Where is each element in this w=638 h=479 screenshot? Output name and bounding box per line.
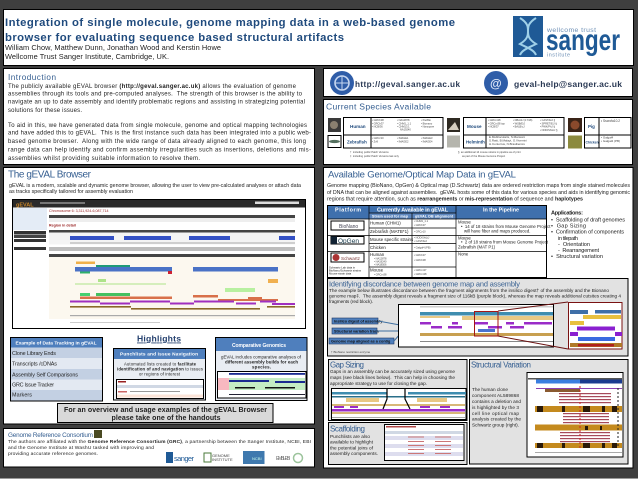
comparative genomics screenshot — [218, 372, 306, 398]
table: platforms: • NA19240 — [374, 260, 387, 264]
panel: comparative genomics: gEVAL includes comparative analyses of — [221, 354, 302, 360]
table: human and zebrafish: • GRCh37 — [372, 122, 384, 126]
logo: Wellcome Trust Sanger: wellcome trust — [546, 27, 596, 34]
title: browser for evaluating sequence based structural artifacts — [5, 32, 344, 44]
heading: structural variation: Structural Variation — [471, 360, 531, 370]
discordance description: The example below illustrates discordance between the fragment alignments from the insilico digest† of the assembly and the Bionano — [329, 288, 609, 293]
table: platforms: • GRCh37 — [414, 253, 426, 257]
table: platforms: BioNano/Schwartz strains — [329, 268, 362, 272]
callout: handouts — [58, 404, 273, 422]
logo: OpGen: OpGen — [338, 238, 359, 245]
heading: the gEVAL browser: The gEVAL Browser — [8, 170, 92, 180]
introduction text: To aid in this, we have generated data from single molecule, genome and optical mapping technologies — [8, 123, 307, 129]
panel: the gEVAL browser — [4, 168, 314, 424]
logo: Schwartz lab: Schwartz — [341, 256, 361, 261]
heading: introduction: Introduction — [8, 73, 56, 82]
scaffolding description: Punchlists are also — [330, 434, 370, 439]
table: platforms: Zebrafish (MATB*1) — [370, 229, 409, 234]
gap sizing description: Gaps in an assembly can be accurately sized using genome — [330, 369, 455, 374]
table: mouse and helminth: H.Contortus, N.Brasiliensis — [489, 142, 525, 146]
structural variation description: contains a deletion and — [472, 399, 521, 404]
table: pig and chicken: • Galgal4 — [601, 136, 614, 140]
introduction text: navigate an up to date assembly and identify problematic regions and assisting in strategizing potential — [8, 100, 305, 106]
table: platforms: • GRCh37 — [414, 223, 426, 227]
gap sizing description: appropriate strategy to use for closing the gap. — [330, 381, 427, 386]
icon: mouse photo — [447, 118, 460, 132]
panel: punchlists: identification of and navigation to issues — [117, 366, 203, 372]
discordance figure — [398, 304, 554, 347]
table: platforms: • CAST/EiJ — [414, 239, 428, 243]
panel: punchlists: Punchlists and Issue Navigation — [120, 352, 198, 358]
table: platforms: Strain used for map — [372, 214, 409, 218]
table: platforms: Currently Available in gEVAL — [377, 208, 449, 214]
browser screenshot — [12, 200, 306, 328]
logo: EMBL-EBI: EMBL-EBI — [276, 456, 291, 462]
icon: pig photo — [568, 118, 582, 132]
introduction text: solutions for these issues. — [8, 108, 82, 114]
logo: Sanger: sanger — [174, 454, 194, 463]
logo: Wellcome Trust Sanger — [513, 16, 620, 58]
table: platforms: • 2 of 18 strains from Mouse Genome Project — [461, 240, 549, 244]
icon: at sign: @ — [490, 76, 502, 90]
table: mouse and helminth: • CAST/EiJ § — [540, 118, 556, 122]
introduction text — [8, 84, 311, 162]
logo: Schwartz lab — [331, 253, 364, 262]
zoom guide lines — [498, 302, 568, 349]
table: human and zebrafish: • PacBio — [421, 118, 431, 122]
table: platforms: Mouse — [458, 236, 472, 240]
panel: available genome/optical map data — [324, 168, 633, 468]
table: pig and chicken — [584, 118, 631, 148]
table: human and zebrafish: • GRCh38 — [372, 118, 384, 122]
email link: geval-help@sanger.ac.uk — [514, 79, 622, 89]
authors — [5, 43, 221, 61]
applications list: - Orientation — [558, 242, 590, 248]
table: mouse and helminth: Mouse — [467, 124, 482, 129]
browser description — [9, 183, 301, 195]
table: platforms: • GRCz10 — [414, 230, 426, 234]
table: human and zebrafish — [344, 118, 443, 148]
website link: http://geval.sanger.ac.uk — [355, 80, 460, 89]
table: platforms: Schwartz Lab data in — [329, 266, 356, 270]
table: platforms: Mouse — [370, 268, 384, 272]
browser screenshot: Region in detail — [49, 224, 76, 228]
applications list: • Gap Sizing — [551, 224, 586, 230]
table: platforms: • 14 of 18 strains from Mouse Genome Project — [461, 224, 551, 229]
table: human and zebrafish: • Nanopore — [421, 124, 435, 128]
icon: zebrafish photo — [328, 136, 341, 148]
table: human and zebrafish: Human — [350, 124, 366, 129]
panel: punchlists: Automated lists created to facilitate — [124, 362, 197, 366]
table: pig and chicken: • Galgal4 (PB) — [601, 139, 620, 143]
table: mouse and helminth: • SPRET/EiJ § — [540, 122, 557, 126]
table: human and zebrafish: NA19240 — [400, 128, 411, 132]
punchlist screenshot — [116, 380, 204, 398]
table: mouse and helminth: • WSB/EiJ — [513, 122, 526, 126]
logo: EMBL-EBI — [276, 454, 302, 462]
panel: current species available — [324, 100, 632, 164]
browser description: gEVAL is a modern, scalable and dynamic genome browser, allowing the user to view pre-calculated analyses or attach data — [9, 183, 301, 189]
scaffolding screenshot — [384, 424, 464, 460]
panel: scaffolding — [328, 422, 467, 464]
gap sizing figure — [332, 388, 466, 420]
table: mouse and helminth: • BALB/cJ — [513, 124, 525, 128]
GRC description: providing accurate reference genomes. — [8, 451, 98, 457]
structural variation description — [472, 387, 521, 428]
table: pig and chicken: • Sscrofa10.2 — [601, 119, 620, 123]
genome mapping description: Genome mapping (BioNano, OpGen) & Optical map (D.Schwartz) data are ordered restriction maps from single stained molecules — [327, 183, 630, 189]
heading: scaffolding: Scaffolding — [330, 424, 365, 434]
callout: handouts: For an overview and usage examples of the gEVAL Browser — [64, 407, 267, 414]
title panel — [4, 10, 634, 66]
highlight box — [474, 312, 498, 336]
footnote: † BioNano restriction enzyme — [331, 350, 371, 354]
panel: genome reference consortium — [4, 428, 314, 467]
table: platforms: • GRCm37 — [414, 268, 427, 272]
zoomed inset — [568, 302, 622, 349]
introduction text: assemblies whilst providing suitable information to resolve them. — [8, 156, 200, 162]
table: human and zebrafish: • IMAGE3 — [421, 136, 433, 140]
table: human and zebrafish: • Zv9 — [372, 140, 379, 144]
panel: structural variation — [470, 360, 628, 464]
callout: handouts: please take one of the handouts — [112, 415, 221, 422]
structural variation description: component AL589868 — [472, 393, 519, 398]
structural variation description: cell line optical map — [472, 411, 519, 416]
table: example of data tracks: Example of Data Tracking in gEVAL — [16, 340, 97, 346]
species footnotes: ‡ including public Patch Versions last only — [350, 154, 400, 158]
discordance description: genome map‡. The assembly digest reveals a fragment size of 116kB (purple block), whereas the map reveals additional cutsites creating 4 — [329, 294, 621, 298]
applications list: in tilepath — [558, 236, 578, 242]
title: Integration of single molecule, genome mapping data in a web-based genome — [5, 17, 455, 29]
authors: Wellcome Trust Sanger Institute, Cambridge, UK. — [5, 52, 169, 61]
table: platforms: None — [458, 252, 469, 256]
logo: Sanger — [166, 452, 194, 463]
table: mouse and helminth: • PWK/PhJ § — [540, 124, 555, 128]
authors: William Chow, Matthew Dunn, Jonathan Wood and Kerstin Howe — [5, 43, 221, 52]
table: platforms: • Galgal4 (PB) — [414, 246, 431, 250]
callout labels: Insilico digest of assembly — [334, 320, 383, 324]
panel: links — [324, 68, 632, 96]
applications list — [551, 210, 625, 260]
heading: identifying discordance: Identifying discordance between genome map and assembly — [329, 280, 520, 288]
panel: introduction — [4, 68, 314, 164]
applications list: • Confirmation of components — [551, 230, 624, 236]
callout labels: Genome map aligned as a contig — [331, 340, 391, 344]
table: example of data tracks — [10, 338, 102, 401]
table: mouse and helminth: • NOD/ShiLtJ § — [540, 128, 558, 132]
table: mouse and helminth: • GRCm38 top — [488, 122, 505, 126]
scaffolding description: available to highlight — [330, 440, 374, 444]
introduction text: range data can help identify and confirm assembly irregularities such as insertions, deletions and mis- — [8, 148, 311, 154]
structural variation description: is highlighted by the 3 — [472, 405, 519, 410]
table: mouse and helminth: • NCBI37 — [488, 124, 499, 128]
panel: punchlists: or regions of interest — [139, 372, 181, 376]
table: example of data tracks: Clone Library Ends — [12, 351, 56, 357]
logo: OpGen — [331, 236, 364, 245]
table: human and zebrafish: • IMAGE2 — [397, 140, 409, 144]
GRC description — [8, 439, 311, 457]
table: platforms: Mouse strain data — [329, 272, 352, 276]
GRC description: The authors are affiliated with the Genome Reference Consortium (GRC), a partnership between the Sanger Institute, NCBI, EBI — [8, 439, 311, 445]
logo: Wellcome Trust Sanger: institute — [547, 52, 570, 58]
table: human and zebrafish: • IMAGE1 — [397, 136, 409, 140]
table: human and zebrafish: • GRCz10 — [372, 136, 384, 140]
table: human and zebrafish: • CHM1_1.1 — [397, 122, 412, 126]
table: platforms: will have fiber and maps produced. — [464, 228, 530, 234]
structural variation description: Schwartz group (right). — [472, 422, 519, 428]
table: platforms: Zebrafish (MAT P1) — [458, 244, 496, 250]
callout labels: Structural variation track — [334, 330, 380, 334]
genome mapping description: regions that require attention, such as rearrangements or mis-representation of sequence and haplotypes — [327, 196, 583, 202]
icon: GRC — [94, 430, 102, 438]
browser description: as tracks specifically tailored for assembly evaluation — [9, 189, 133, 195]
logo: Genome Institute: INSTITUTE — [212, 457, 233, 462]
logo: NCBI — [243, 451, 264, 464]
table: human and zebrafish: Zebrafish — [347, 140, 367, 144]
icon: globe — [330, 71, 354, 95]
logo: Genome Institute: GENOME — [212, 453, 230, 458]
panel: comparative genomics: species. — [252, 364, 271, 370]
scaffolding description — [330, 434, 378, 456]
heading: highlights: Highlights — [137, 334, 181, 344]
GRC description: and the Genome Institute at WashU tasked with improving and — [8, 445, 154, 451]
table: mouse and helminth: E.Multilocularis, S.Mansoni — [489, 135, 525, 139]
genome mapping description — [327, 183, 630, 202]
table: platforms: • GRCm38 — [414, 272, 427, 276]
table: human and zebrafish: • IMAGE4 — [421, 140, 433, 144]
gap sizing description — [330, 369, 455, 386]
table: example of data tracks: Transcripts /cDNAs — [12, 362, 57, 368]
logo: BioNano: BioNano — [339, 224, 358, 230]
table: mouse and helminth: • GRCm38 — [488, 118, 501, 122]
table: human and zebrafish: • NA12878 — [397, 118, 410, 122]
table: mouse and helminth: S.Ratti, B.Malayi, O.Viverrini — [489, 138, 527, 142]
panel: gap sizing — [328, 360, 467, 420]
table: example of data tracks: Assembly Self Comparisons — [12, 372, 78, 378]
panel: punchlists — [114, 348, 206, 400]
table: platforms: • NA18506 — [374, 262, 387, 266]
structural variation figure — [527, 372, 623, 457]
introduction text: and have added this to gEVAL. This is the first instance such data has been integrated into a public web- — [8, 131, 311, 137]
icon: at sign — [484, 71, 508, 95]
table: mouse and helminth — [464, 118, 564, 148]
structural variation description: The human clone — [472, 387, 508, 392]
table: platforms: Mouse — [458, 220, 472, 224]
species footnotes: § an additional 14 mouse strains in pipeline as of print — [458, 150, 521, 154]
table: example of data tracks: GRC Issue Tracker — [12, 382, 54, 388]
table: platforms: Chicken — [370, 245, 386, 250]
logo: NCBI: NCBI — [252, 456, 262, 461]
table: platforms: • GRCm38 — [374, 272, 387, 276]
table: pig and chicken: Pig — [588, 124, 595, 129]
applications list: Applications: — [551, 210, 583, 216]
table: platforms: Human (CHM1) — [370, 220, 401, 226]
logo: BioNano — [331, 221, 364, 230]
table: example of data tracks: Markers — [12, 392, 32, 398]
table: platforms: gEVAL DB alignment — [415, 214, 454, 218]
table: human and zebrafish: • NCBI36 — [372, 124, 383, 128]
icon: human photo — [328, 118, 341, 132]
introduction text: based genome browser. Along with the wide range of data already aligned to each genome, this long — [8, 139, 306, 145]
heading: available genome/optical map data: Available Genome/Optical Map Data in gEVAL — [328, 170, 517, 180]
heading: current species: Current Species Available — [326, 102, 431, 112]
panel: identifying discordance — [328, 278, 628, 356]
introduction text: The publicly available gEVAL browser (http://geval.sanger.ac.uk) allows the evaluation of genome — [8, 84, 297, 90]
panel: comparative genomics — [216, 338, 307, 400]
species footnotes: as part of the Mouse Genome Project — [462, 154, 505, 158]
structural variation description: analysis created by the — [472, 416, 521, 422]
scaffolding description: assembly components. — [330, 451, 378, 456]
table: platforms: In the Pipeline — [483, 208, 519, 214]
table: platforms: Human — [370, 252, 385, 257]
browser screenshot: Chromosome 6: 3,311,924-6,087,714 — [49, 209, 108, 213]
applications list: • Scaffolding of draft genomes — [551, 218, 625, 224]
logo: Genome Institute — [204, 453, 233, 462]
panel: comparative genomics: Comparative Genomics — [232, 343, 286, 349]
panel: comparative genomics: different assembly builds for each — [225, 360, 298, 364]
table: mouse and helminth: • DBA/2J (17/18) — [513, 118, 532, 122]
heading: gap sizing: Gap Sizing — [330, 360, 364, 370]
table: platforms — [328, 206, 551, 278]
applications list: - Rearrangement — [558, 248, 599, 254]
table: human and zebrafish: • Bionano — [421, 122, 433, 126]
browser screenshot: gEVAL — [16, 202, 34, 208]
table: platforms: Mouse specific strains — [370, 237, 414, 242]
species footnotes: † including public Patch Versions — [350, 150, 389, 154]
applications list: • Structural variation — [551, 254, 603, 260]
icon: chicken photo — [568, 136, 582, 148]
species footnotes — [350, 150, 521, 158]
scaffolding description: the potential joins of — [330, 446, 374, 450]
title — [5, 17, 455, 44]
table: platforms: Platform — [335, 208, 361, 214]
heading: genome reference consortium: Genome Reference Consortium — [8, 432, 93, 439]
table: platforms: • CHM1_1.1 — [414, 219, 429, 223]
table: platforms: • GRCh38 — [414, 258, 426, 262]
table: human and zebrafish: • CHM13.1 — [397, 124, 410, 128]
gap sizing description: maps (see black lines below). This can help in choosing the — [330, 375, 455, 380]
icon: helminth photo — [447, 136, 460, 148]
discordance description: fragments (red block). — [329, 299, 373, 304]
discordance description — [329, 288, 621, 304]
table: mouse and helminth: Helminth — [466, 140, 485, 144]
callout labels — [329, 318, 400, 344]
table: platforms: • NA12878 — [374, 256, 387, 260]
table: platforms: • NOD/ShiLtJ — [414, 236, 430, 240]
genome mapping description: of DNA that can be aligned against assemblies. gEVAL hosts some of this data for various species and aids in identifying genomic — [327, 190, 630, 196]
table: pig and chicken: Chicken — [586, 140, 599, 144]
introduction text: assemblies through its tools and pre-computed analyses. The strength of this browser is the ability to — [8, 92, 303, 98]
